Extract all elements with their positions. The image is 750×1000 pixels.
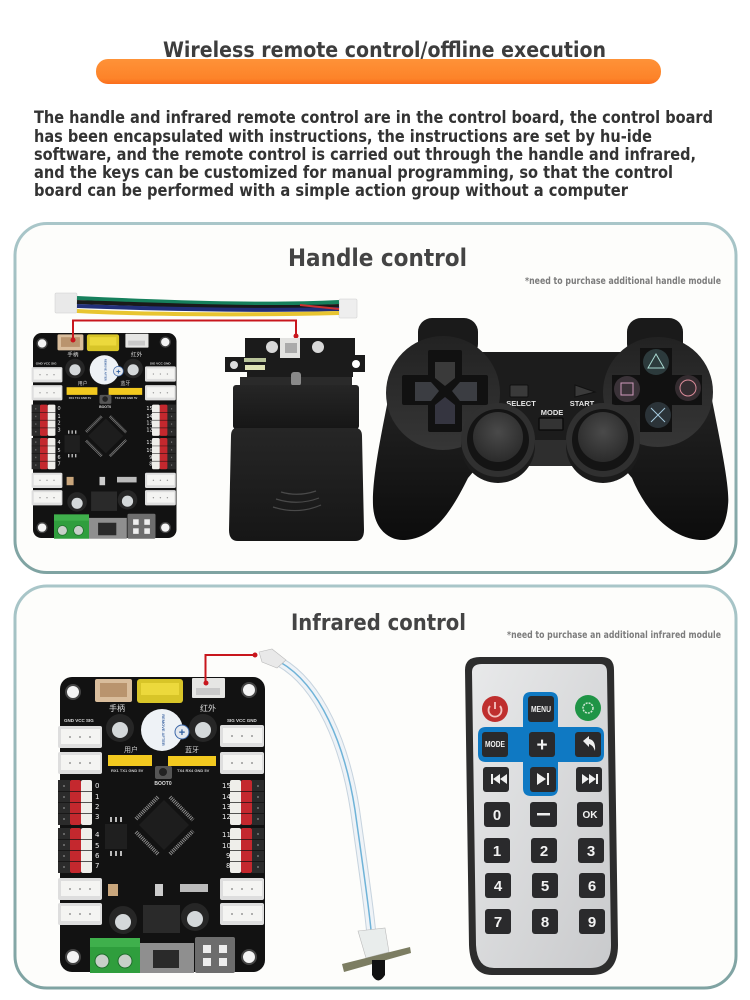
- remote keypad: 4: [494, 878, 503, 895]
- remote keypad: 7: [494, 914, 502, 931]
- remote keypad: +: [536, 735, 548, 756]
- heading: infrared control: Infrared control: [291, 611, 466, 636]
- remote control: [465, 657, 618, 975]
- remote keypad: 5: [541, 878, 549, 895]
- remote keypad: 0: [493, 807, 501, 824]
- remote keypad: [482, 696, 605, 934]
- intro paragraph: and the keys can be customized for manual programming, so that the control: [34, 163, 673, 182]
- power and mute buttons: [482, 695, 601, 722]
- select, start and mode buttons: [506, 385, 595, 430]
- remote keypad: 9: [588, 914, 596, 931]
- heading: handle control: Handle control: [288, 244, 467, 272]
- connection cable: [55, 293, 357, 318]
- infrared cable and sensor: [259, 649, 411, 980]
- remote keypad: 3: [587, 843, 595, 860]
- red connector line: [204, 652, 258, 686]
- wireless receiver: [225, 338, 365, 541]
- remote keypad: 6: [588, 878, 596, 895]
- remote keypad: 2: [540, 843, 548, 860]
- orange title bar: [96, 59, 661, 84]
- remote keypad: 1: [493, 843, 501, 860]
- intro paragraph: [34, 108, 713, 200]
- blue d-pad plate: [478, 692, 604, 796]
- select, start and mode buttons: SELECT: [506, 399, 536, 408]
- action buttons: [612, 348, 702, 432]
- panel: handle control: [15, 224, 736, 572]
- thumbsticks: [461, 403, 640, 483]
- d-pad: [402, 350, 488, 432]
- intro paragraph: has been encapsulated with instructions, the instructions are set by hu-ide: [34, 127, 652, 146]
- panel: infrared control: [15, 586, 736, 988]
- remote keypad: MODE: [485, 740, 506, 749]
- control board: handle: [32, 333, 176, 539]
- select, start and mode buttons: START: [570, 399, 595, 408]
- gamepad: [373, 318, 728, 540]
- remote keypad: MENU: [531, 705, 551, 714]
- title: Wireless remote control/offline execution: [163, 38, 606, 62]
- red connector line: [70, 320, 298, 342]
- remote keypad: OK: [582, 810, 598, 821]
- intro paragraph: board can be performed with a simple action group without a computer: [34, 181, 629, 200]
- control board: infrared: [58, 677, 265, 973]
- select, start and mode buttons: MODE: [541, 408, 563, 417]
- remote keypad: 8: [541, 914, 549, 931]
